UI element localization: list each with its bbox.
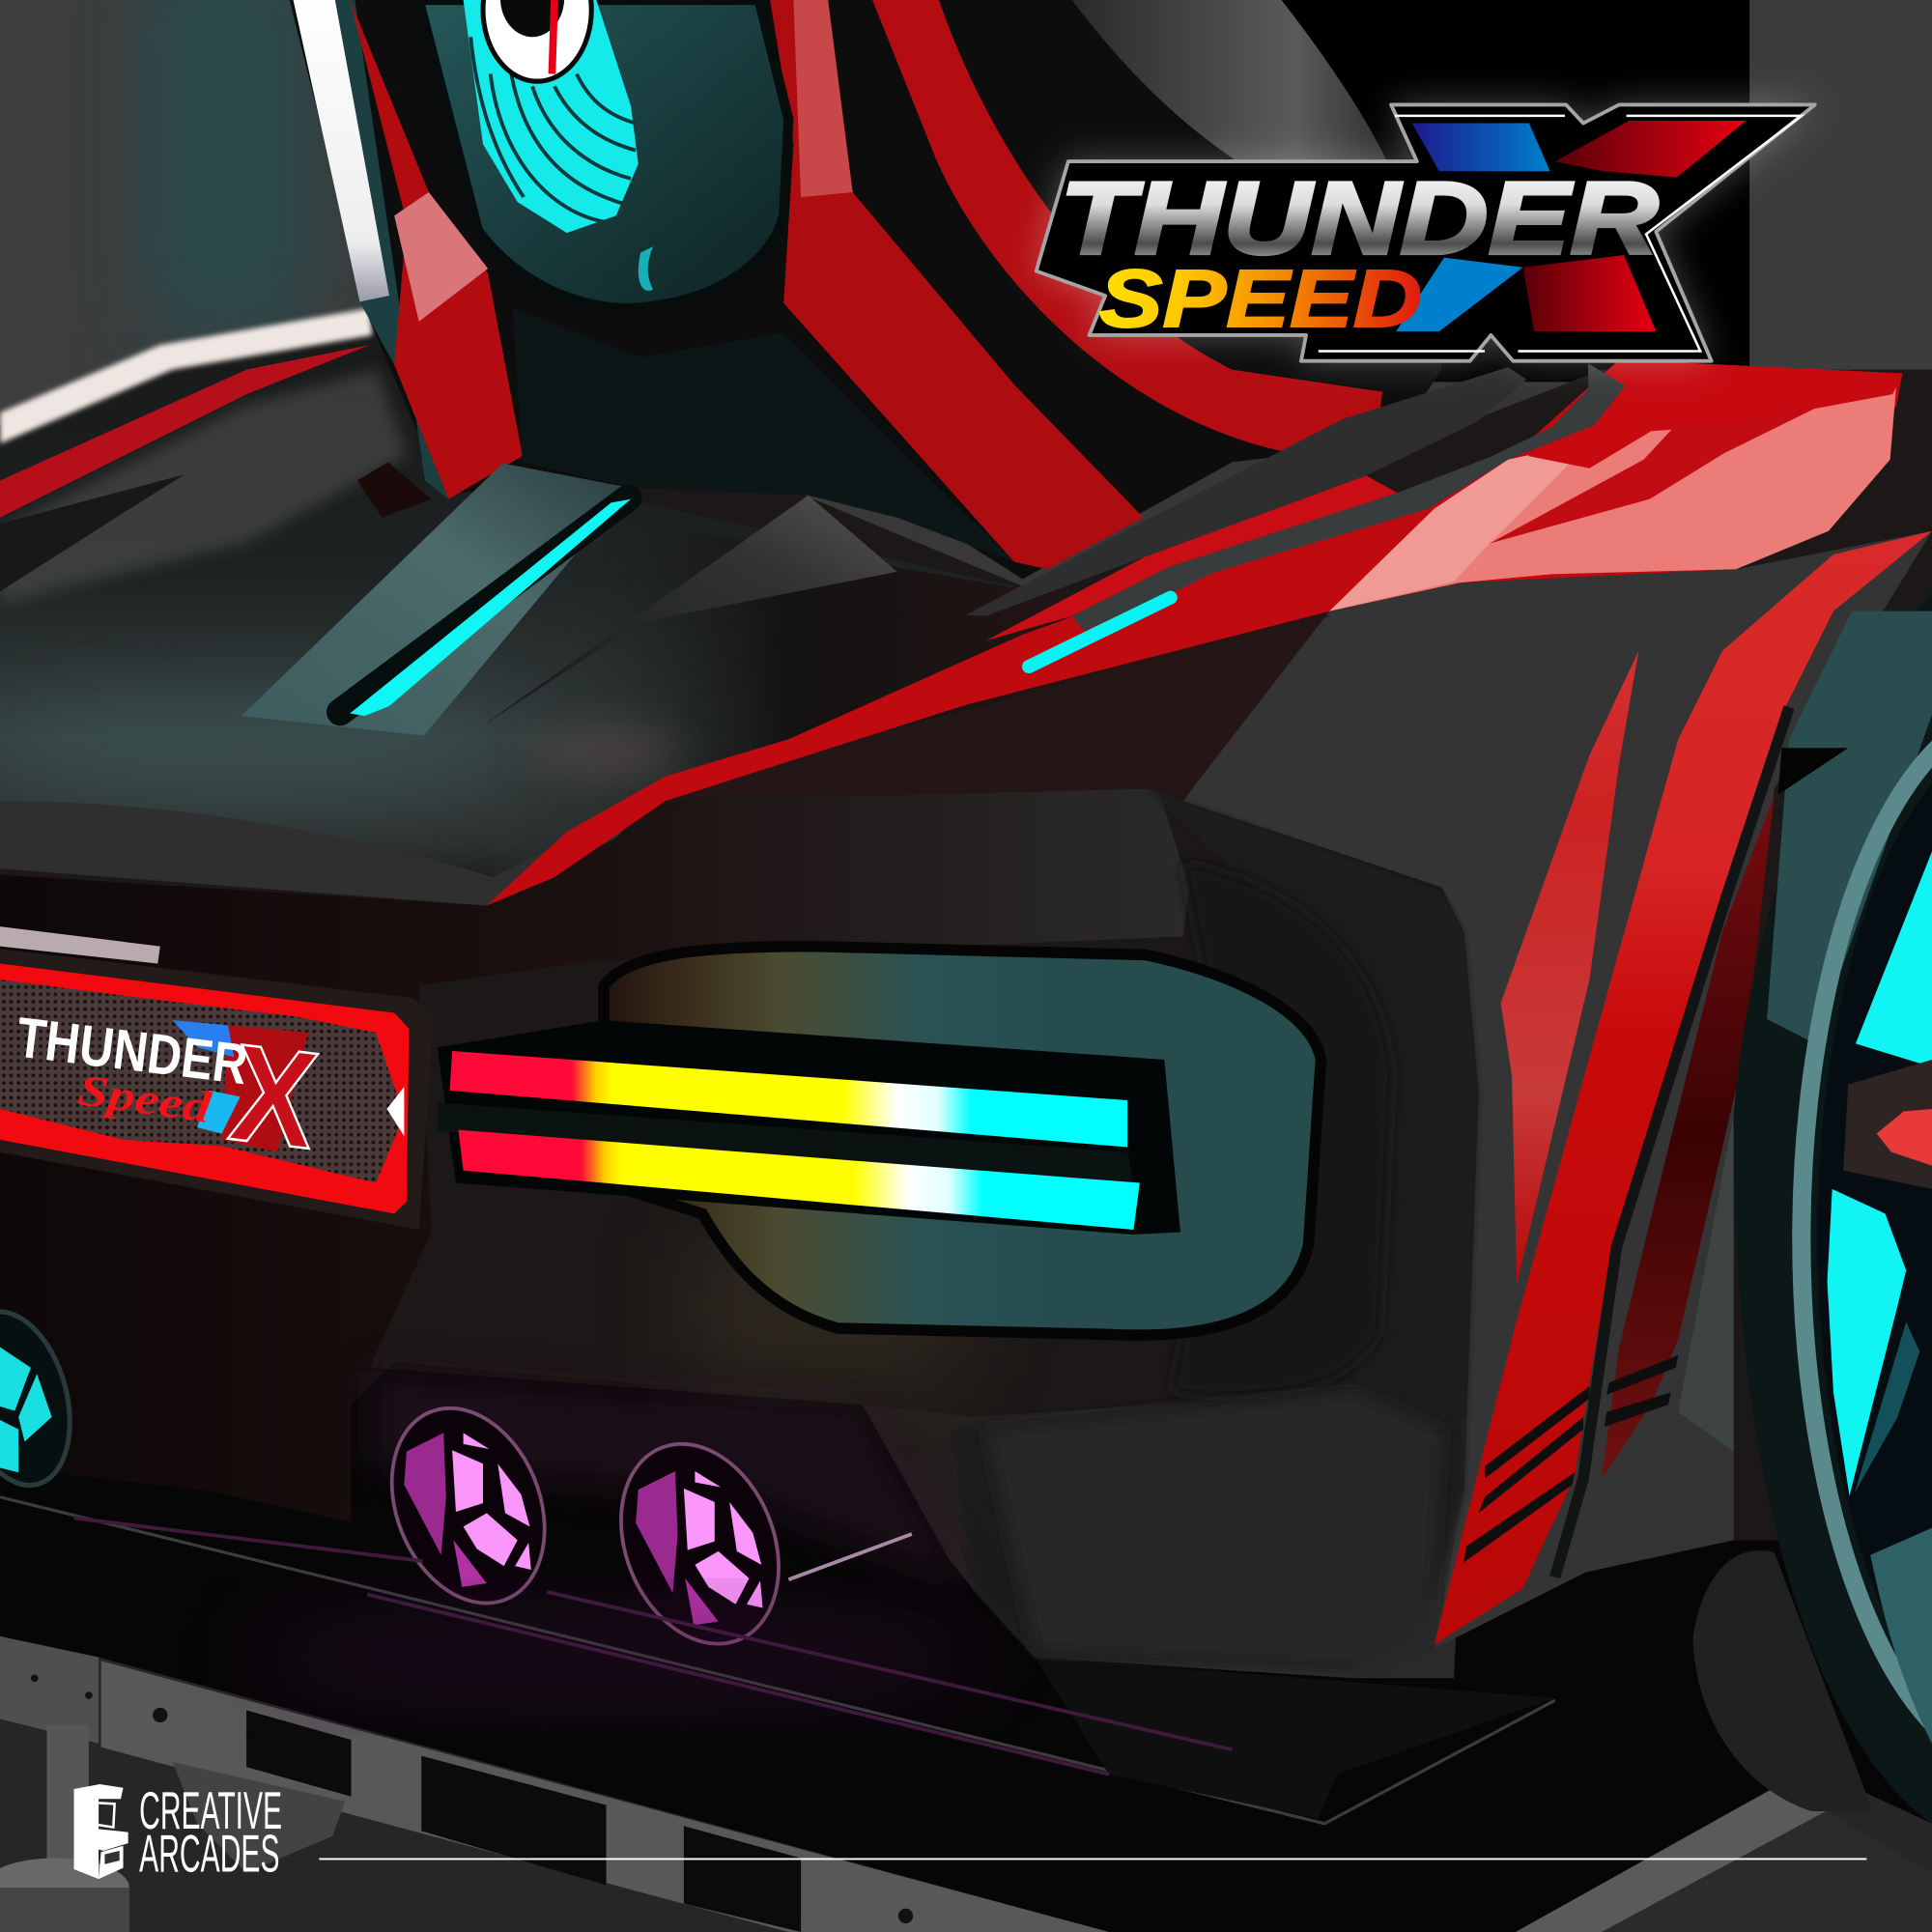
exhaust recess haze bbox=[370, 1370, 974, 1589]
hood deck bbox=[0, 308, 1331, 906]
rear plate bbox=[0, 926, 434, 1230]
product logo: Thunder Speed X bbox=[1037, 104, 1815, 361]
rear fascia bbox=[0, 788, 1466, 1678]
icon: arcade cabinet bbox=[74, 1784, 128, 1879]
exhaust left bbox=[364, 1385, 572, 1626]
hood vent bbox=[242, 464, 897, 735]
quarter panel stripes bbox=[1435, 531, 1932, 1645]
quarter panel upper bbox=[1146, 531, 1932, 1649]
wheel bbox=[1678, 591, 1932, 1824]
steel frame bbox=[0, 1636, 1109, 1932]
plate logo: X bbox=[223, 1016, 325, 1179]
quarter panel dark core bbox=[949, 788, 1479, 1668]
seat red side bbox=[350, 0, 523, 499]
wheel rim bbox=[1802, 708, 1932, 1768]
seat teal trim bbox=[335, 0, 448, 499]
red fender bbox=[487, 359, 1902, 906]
logo X blue bbox=[1396, 124, 1550, 331]
LED bar upper bbox=[450, 1051, 1127, 1148]
wheel cyan panels bbox=[1856, 851, 1932, 1067]
footer rule bbox=[319, 1858, 1866, 1860]
plate logo: THUNDER bbox=[14, 1006, 251, 1096]
logo THUNDER: THUNDER bbox=[1060, 160, 1659, 276]
fender grey bands bbox=[1072, 363, 1625, 631]
floor and platform bbox=[0, 1355, 1932, 1932]
wheel lower streaks bbox=[1870, 1528, 1932, 1744]
fender pink reflection bbox=[1329, 385, 1896, 611]
wordmark: ARCADES bbox=[139, 1823, 280, 1883]
fender red spike bbox=[1490, 402, 1829, 543]
headrest badge bbox=[483, 0, 591, 81]
seat red stripe wide bbox=[770, 0, 1144, 569]
wheel upper wall bbox=[1767, 611, 1932, 1043]
headrest bbox=[419, 0, 788, 308]
plate logo: Speed bbox=[75, 1065, 214, 1132]
seat neck bbox=[513, 308, 1014, 562]
wordmark bbox=[139, 1780, 282, 1884]
left cyan exhaust bbox=[0, 1299, 88, 1497]
exhaust right bbox=[592, 1420, 808, 1667]
pink exhausts bbox=[74, 1385, 1233, 1775]
logo X red bbox=[1319, 116, 1802, 352]
headrest cyan panel bbox=[464, 0, 639, 233]
side light housing bbox=[438, 947, 1321, 1335]
seat white trim bbox=[294, 0, 389, 301]
car body bbox=[0, 314, 1932, 1678]
seat side grey bbox=[1072, 0, 1417, 246]
logo SPEED: SPEED bbox=[1099, 253, 1422, 344]
seat red stripe curved bbox=[872, 0, 1382, 451]
Creative Arcades brand bbox=[74, 1780, 282, 1884]
plate logo bbox=[14, 1006, 325, 1179]
LED bar lower bbox=[458, 1130, 1140, 1230]
wordmark: CREATIVE bbox=[139, 1780, 282, 1840]
fender cyan light bbox=[1029, 598, 1171, 667]
seat bbox=[290, 0, 1441, 579]
